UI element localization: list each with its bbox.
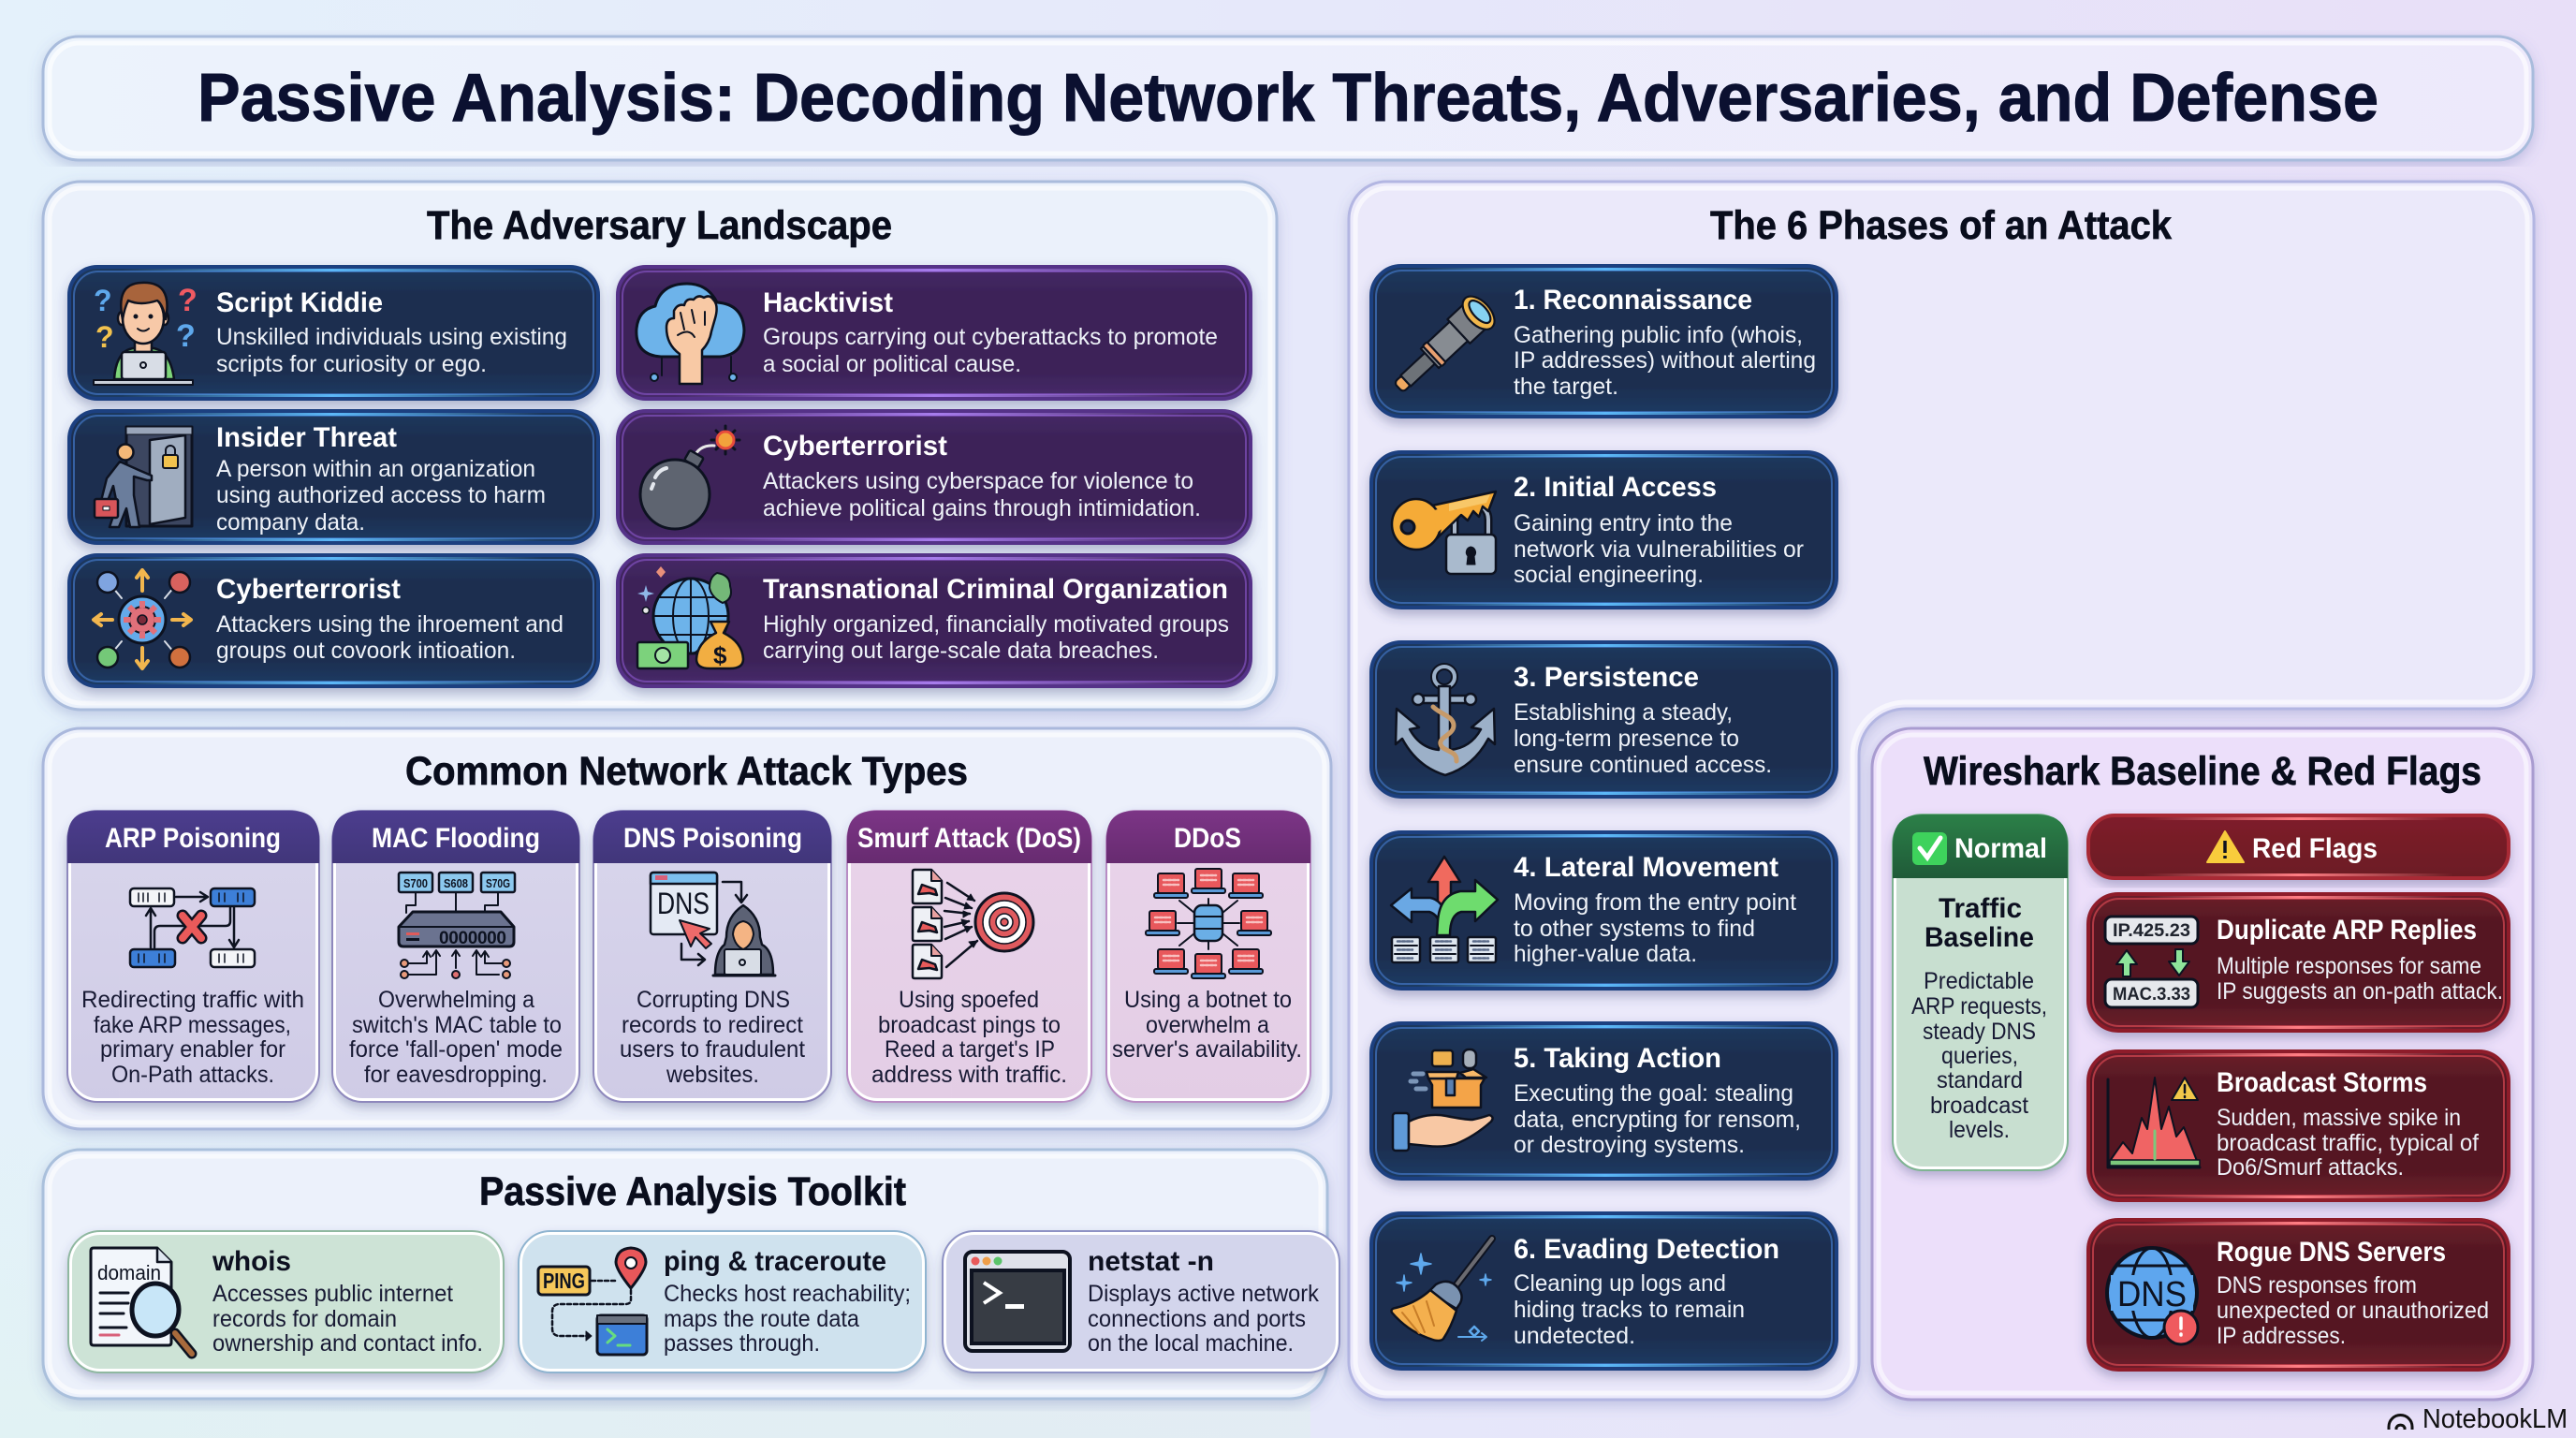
text: arp poisoning description: Redirecting traffic with [81, 987, 304, 1013]
text: traffic baseline: levels. [1949, 1117, 2010, 1143]
text: rogue dns servers: Rogue DNS Servers [2217, 1237, 2446, 1268]
heading: wireshark baseline and red flags: Wireshark Baseline & Red Flags [1924, 749, 2481, 794]
text: lateral movement: higher-value data. [1514, 941, 1697, 967]
text: reconnaissance [1514, 285, 1816, 400]
text: arp poisoning description: On-Path attacks. [111, 1062, 274, 1088]
text: persistence: Establishing a steady, [1514, 699, 1733, 726]
text: arp poisoning description: fake ARP messages, [94, 1012, 291, 1038]
text: broadcast storms: broadcast traffic, typical of [2217, 1130, 2479, 1156]
text: lateral movement [1514, 852, 1796, 967]
text: rogue dns servers: DNS responses from [2217, 1272, 2417, 1299]
phase 6 card: evading detection [1371, 1213, 1837, 1369]
text: netstat: netstat -n [1088, 1246, 1214, 1277]
text: taking action: data, encrypting for rensom, [1514, 1107, 1801, 1133]
card: hacktivist [618, 267, 1251, 399]
heading: the 6 phases: The 6 Phases of an Attack [1710, 203, 2172, 248]
text: traffic baseline: queries, [1941, 1043, 2018, 1069]
logo: notebooklm: NotebookLM [2422, 1404, 2568, 1434]
text: traffic baseline: Predictable [1924, 968, 2034, 994]
text: whois: Accesses public internet [212, 1281, 453, 1307]
text: evading detection [1514, 1234, 1779, 1349]
card: cyberterrorist (right) [618, 411, 1251, 543]
text: lateral movement: Moving from the entry point [1514, 889, 1796, 916]
icon: person with laptop and question marks: ? [94, 284, 112, 317]
text: netstat: connections and ports [1088, 1306, 1306, 1332]
icon: globe with money [637, 566, 743, 669]
text: insider threat: using authorized access to harm [216, 482, 546, 508]
text: traffic baseline: broadcast [1930, 1093, 2028, 1119]
text: transnational criminal organization: Highly organized, financially motivated groups [763, 611, 1229, 638]
text: evading detection: hiding tracks to remain [1514, 1297, 1745, 1323]
card: rogue dns servers [2088, 1220, 2509, 1370]
card: arp poisoning [67, 811, 319, 1102]
phase 1 card: reconnaissance [1371, 266, 1837, 417]
text: smurf attack description [871, 987, 1067, 1088]
text: ddos description [1112, 987, 1302, 1063]
icon: dns globe with alert: DNS [2117, 1275, 2187, 1314]
text: lateral movement: 4. Lateral Movement [1514, 852, 1778, 883]
text: initial access [1514, 472, 1804, 588]
text: rogue dns servers: IP addresses. [2217, 1323, 2346, 1349]
text: arp poisoning description [81, 987, 304, 1088]
text: mac flooding description: for eavesdropping. [364, 1062, 548, 1088]
icon: network switch flooded by connections: S700 [403, 876, 428, 890]
icon: branching arrows and servers [1391, 857, 1498, 962]
phase 3 card: persistence [1371, 642, 1837, 797]
text: traffic baseline: standard [1937, 1067, 2023, 1093]
text: traffic baseline: Baseline [1925, 922, 2034, 953]
icon: domain document with magnifier: domain [97, 1261, 161, 1284]
icon: person with laptop and question marks [94, 283, 198, 385]
icon: dns globe with alert [2107, 1248, 2198, 1344]
text: evading detection: undetected. [1514, 1323, 1635, 1349]
card: whois [68, 1231, 504, 1372]
card: script kiddie [69, 267, 598, 399]
text: cyberterrorist (left): Cyberterrorist [216, 574, 401, 605]
icon: ip and mac boxes with arrows: MAC.3.33 [2113, 985, 2190, 1005]
text: taking action: or destroying systems. [1514, 1132, 1745, 1158]
card: ddos: DDoS [1174, 823, 1241, 854]
icon: warning triangle [2207, 831, 2244, 862]
icon: network switch flooded by connections: S70G [486, 876, 510, 890]
text: ddos description: overwhelm a [1146, 1012, 1269, 1038]
text: cyberterrorist (right) [763, 431, 1201, 521]
text: netstat: Displays active network [1088, 1281, 1319, 1307]
icon: dns browser and hooded hacker [651, 873, 775, 976]
text: insider threat: company data. [216, 509, 365, 536]
text: dns poisoning description: records to redirect [622, 1012, 803, 1038]
card: mac flooding: MAC Flooding [372, 823, 540, 854]
phase 2 card: initial access [1371, 452, 1837, 608]
text: netstat [1088, 1246, 1319, 1357]
text: dns poisoning description: Corrupting DNS [637, 987, 790, 1013]
text: smurf attack description: broadcast pings to [878, 1012, 1061, 1038]
icon: person at a locked door [95, 427, 192, 527]
text: persistence [1514, 662, 1772, 778]
text: duplicate arp replies: Multiple responses for same [2217, 953, 2481, 979]
text: traffic baseline: steady DNS [1923, 1019, 2036, 1045]
text: smurf attack description: Reed a target's IP [885, 1036, 1055, 1063]
text: whois: records for domain [212, 1306, 397, 1332]
icon: globe with money: $ [713, 641, 727, 669]
text: duplicate arp replies: IP suggests an on-path attack. [2217, 978, 2503, 1005]
heading: the adversary landscape: The Adversary Landscape [427, 203, 892, 248]
icon: bomb with lit fuse [640, 426, 739, 529]
text: initial access: Gaining entry into the [1514, 510, 1733, 536]
text: broadcast storms: Sudden, massive spike in [2217, 1105, 2461, 1131]
text: cyberterrorist (left): groups out covoork intioation. [216, 638, 516, 664]
text: taking action [1514, 1043, 1801, 1158]
icon: terminal window [965, 1252, 1070, 1351]
icon: traffic spike chart with warning [2108, 1078, 2200, 1167]
card: broadcast storms [2088, 1051, 2509, 1200]
heading: passive analysis toolkit: Passive Analysis Toolkit [479, 1169, 906, 1214]
icon: network switch flooded by connections: 0000000 [439, 929, 506, 948]
icon: person with laptop and question marks: ? [95, 320, 114, 354]
icon: open box above a hand [1393, 1049, 1493, 1151]
text: ping and traceroute: maps the route data [664, 1306, 859, 1332]
text: arp poisoning description: primary enabler for [100, 1036, 285, 1063]
card: transnational criminal organization [618, 555, 1251, 686]
icon: ip and mac boxes with arrows [2105, 917, 2198, 1007]
text: evading detection: Cleaning up logs and [1514, 1270, 1726, 1297]
text: ping and traceroute [664, 1246, 911, 1357]
text: reconnaissance: 1. Reconnaissance [1514, 285, 1752, 315]
text: cyberterrorist (right): Cyberterrorist [763, 431, 947, 462]
text: cyberterrorist (left): Attackers using the ihroement and [216, 611, 564, 638]
icon: botnet laptops around a server [1146, 869, 1271, 978]
header: red flags [2088, 815, 2509, 878]
panel: the adversary landscape [43, 182, 1277, 710]
panel: wireshark baseline and red flags [1872, 728, 2533, 1400]
text: whois: ownership and contact info. [212, 1330, 483, 1357]
text: ping and traceroute: ping & traceroute [664, 1246, 886, 1277]
card: duplicate arp replies [2088, 894, 2509, 1031]
card: insider threat [69, 411, 598, 543]
card: netstat [943, 1231, 1339, 1372]
text: broadcast storms [2217, 1067, 2479, 1181]
card: ddos [1106, 811, 1310, 1102]
text: traffic baseline [1911, 893, 2047, 1143]
text: initial access: social engineering. [1514, 562, 1704, 588]
text: duplicate arp replies [2217, 915, 2503, 1005]
text: rogue dns servers [2217, 1237, 2489, 1349]
text: smurf attack description: address with traffic. [871, 1062, 1067, 1088]
icon: person with laptop and question marks: ? [178, 283, 198, 318]
card: arp poisoning: ARP Poisoning [105, 823, 281, 854]
icon: spyglass [1385, 290, 1500, 402]
text: dns poisoning description [620, 987, 805, 1088]
title [43, 37, 2533, 160]
icon: network switch flooded by connections [399, 873, 515, 978]
text: reconnaissance: Gathering public info (whois, [1514, 322, 1803, 348]
text: ddos description: Using a botnet to [1124, 987, 1292, 1013]
text: script kiddie: Unskilled individuals using existing [216, 324, 567, 350]
text: taking action: Executing the goal: stealing [1514, 1080, 1793, 1107]
text: insider threat: Insider Threat [216, 422, 397, 453]
text: cyberterrorist (right): achieve political gains through intimidation. [763, 495, 1201, 521]
icon: green check box [1912, 832, 1947, 865]
icon: domain document with magnifier [91, 1248, 192, 1354]
text: broadcast storms: Broadcast Storms [2217, 1067, 2427, 1098]
text: dns poisoning description: websites. [666, 1062, 759, 1088]
text: whois [212, 1246, 483, 1357]
text: evading detection: 6. Evading Detection [1514, 1234, 1779, 1265]
text: netstat: on the local machine. [1088, 1330, 1294, 1357]
icon: spoofed pings aimed at a target [913, 870, 1033, 978]
icon: person with laptop and question marks: ? [176, 318, 196, 354]
text: whois: whois [212, 1246, 291, 1277]
icon: key and padlock [1392, 492, 1496, 574]
panel: the 6 phases of an attack [1349, 182, 2534, 1400]
text: hacktivist: a social or political cause. [763, 351, 1021, 377]
card: normal traffic baseline: Normal [1954, 833, 2047, 864]
text: mac flooding description: force 'fall-open' mode [349, 1036, 563, 1063]
card: smurf attack: Smurf Attack (DoS) [857, 823, 1081, 854]
icon: dns browser and hooded hacker: DNS [657, 887, 710, 920]
text: initial access: network via vulnerabilities or [1514, 536, 1804, 563]
text: reconnaissance: IP addresses) without alerting [1514, 347, 1816, 374]
text: ddos description: server's availability. [1112, 1036, 1302, 1063]
text: ping and traceroute: Checks host reachability; [664, 1281, 911, 1307]
title: Passive Analysis: Decoding Network Threats, Adversaries, and Defense [198, 61, 2378, 136]
text: hacktivist: Groups carrying out cyberattacks to promote [763, 324, 1218, 350]
icon: network switch flooded by connections: S608 [444, 876, 468, 890]
icon: arp redirect diagram [130, 888, 255, 967]
text: persistence: long-term presence to [1514, 726, 1739, 752]
card: dns poisoning [593, 811, 831, 1102]
text: duplicate arp replies: Duplicate ARP Replies [2217, 915, 2477, 946]
text: rogue dns servers: unexpected or unauthorized [2217, 1298, 2489, 1324]
card: cyberterrorist (left) [69, 555, 598, 686]
text: persistence: 3. Persistence [1514, 662, 1699, 693]
card: mac flooding [332, 811, 579, 1102]
text: mac flooding description: switch's MAC table to [352, 1012, 562, 1038]
text: insider threat: A person within an organization [216, 456, 535, 482]
text: mac flooding description [349, 987, 563, 1088]
panel: passive analysis toolkit [43, 1150, 1339, 1399]
text: cyberterrorist (left) [216, 574, 564, 664]
text: broadcast storms: Do6/Smurf attacks. [2217, 1154, 2404, 1181]
text: mac flooding description: Overwhelming a [378, 987, 534, 1013]
text: script kiddie: scripts for curiosity or ego. [216, 351, 487, 377]
text: hacktivist [763, 287, 1218, 377]
icon: ping route to pin and terminal [538, 1248, 647, 1355]
card: smurf attack [847, 811, 1091, 1102]
text: persistence: ensure continued access. [1514, 752, 1772, 778]
text: script kiddie [216, 287, 567, 377]
card: dns poisoning: DNS Poisoning [623, 823, 802, 854]
phase 5 card: taking action [1371, 1023, 1837, 1179]
icon: anchor [1396, 667, 1495, 775]
icon: ping route to pin and terminal: PING [543, 1269, 585, 1293]
phase 4 card: lateral movement [1371, 832, 1837, 989]
text: initial access: 2. Initial Access [1514, 472, 1717, 503]
text: script kiddie: Script Kiddie [216, 287, 383, 318]
text: dns poisoning description: users to fraudulent [620, 1036, 805, 1063]
text: lateral movement: to other systems to find [1514, 916, 1755, 942]
icon: gear hub with radiating nodes [94, 570, 191, 668]
text: insider threat [216, 422, 546, 536]
icon: ip and mac boxes with arrows: IP.425.23 [2113, 921, 2190, 941]
card: normal traffic baseline [1893, 814, 2068, 1170]
text: reconnaissance: the target. [1514, 374, 1618, 400]
text: cyberterrorist (right): Attackers using cyberspace for violence to [763, 468, 1193, 494]
text: smurf attack description: Using spoefed [899, 987, 1039, 1013]
text: hacktivist: Hacktivist [763, 287, 893, 318]
text: ping and traceroute: passes through. [664, 1330, 820, 1357]
icon: raised fist in a cloud [637, 284, 744, 384]
text: transnational criminal organization [763, 574, 1229, 664]
text: transnational criminal organization: carrying out large-scale data breaches. [763, 638, 1159, 664]
text: transnational criminal organization: Transnational Criminal Organization [763, 574, 1228, 605]
heading: common network attack types: Common Network Attack Types [405, 749, 968, 794]
card: ping and traceroute [519, 1231, 926, 1372]
icon: broom with sparkles [1391, 1239, 1492, 1341]
text: traffic baseline: Traffic [1939, 893, 2022, 924]
header: red flags: Red Flags [2252, 833, 2378, 864]
text: taking action: 5. Taking Action [1514, 1043, 1721, 1074]
text: traffic baseline: ARP requests, [1911, 993, 2047, 1020]
panel: common network attack types [43, 728, 1331, 1129]
